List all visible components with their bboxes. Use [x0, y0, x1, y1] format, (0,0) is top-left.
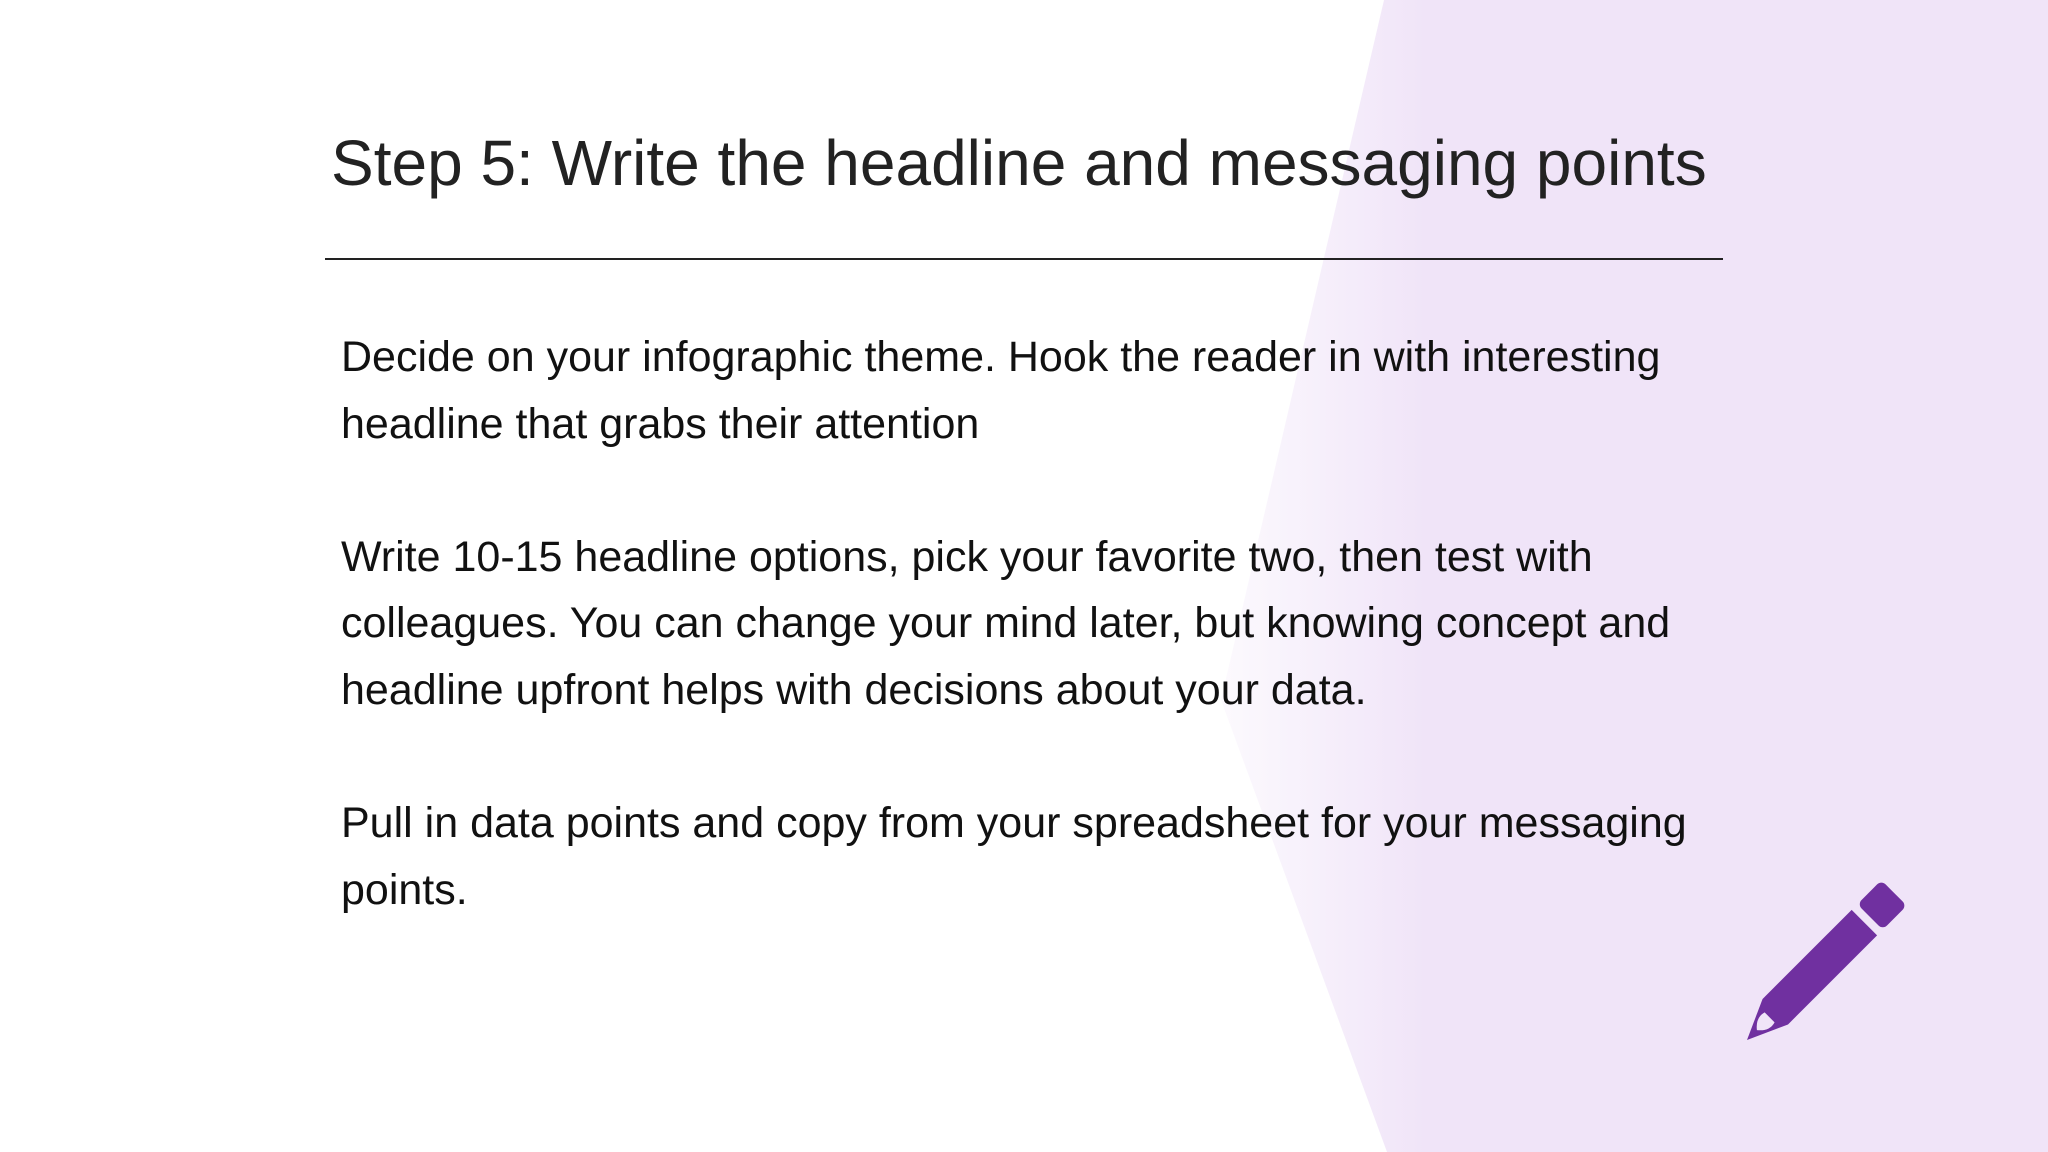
paragraph 2: headline upfront helps with decisions about your data. [341, 666, 1367, 714]
paragraph 2: Write 10-15 headline options, pick your favorite two, then test with [341, 533, 1593, 581]
paragraph 3 [341, 799, 1687, 914]
title: Step 5: Write the headline and messaging points [331, 127, 1707, 199]
paragraph 3: Pull in data points and copy from your spreadsheet for your messaging [341, 799, 1687, 847]
body text [341, 333, 1687, 914]
paragraph 2 [341, 533, 1670, 714]
paragraph 1: Decide on your infographic theme. Hook the reader in with interesting [341, 333, 1660, 381]
paragraph 1: headline that grabs their attention [341, 400, 979, 448]
paragraph 3: points. [341, 866, 468, 914]
paragraph 2: colleagues. You can change your mind later, but knowing concept and [341, 599, 1670, 647]
paragraph 1 [341, 333, 1660, 448]
icon: pencil [1747, 882, 1904, 1040]
